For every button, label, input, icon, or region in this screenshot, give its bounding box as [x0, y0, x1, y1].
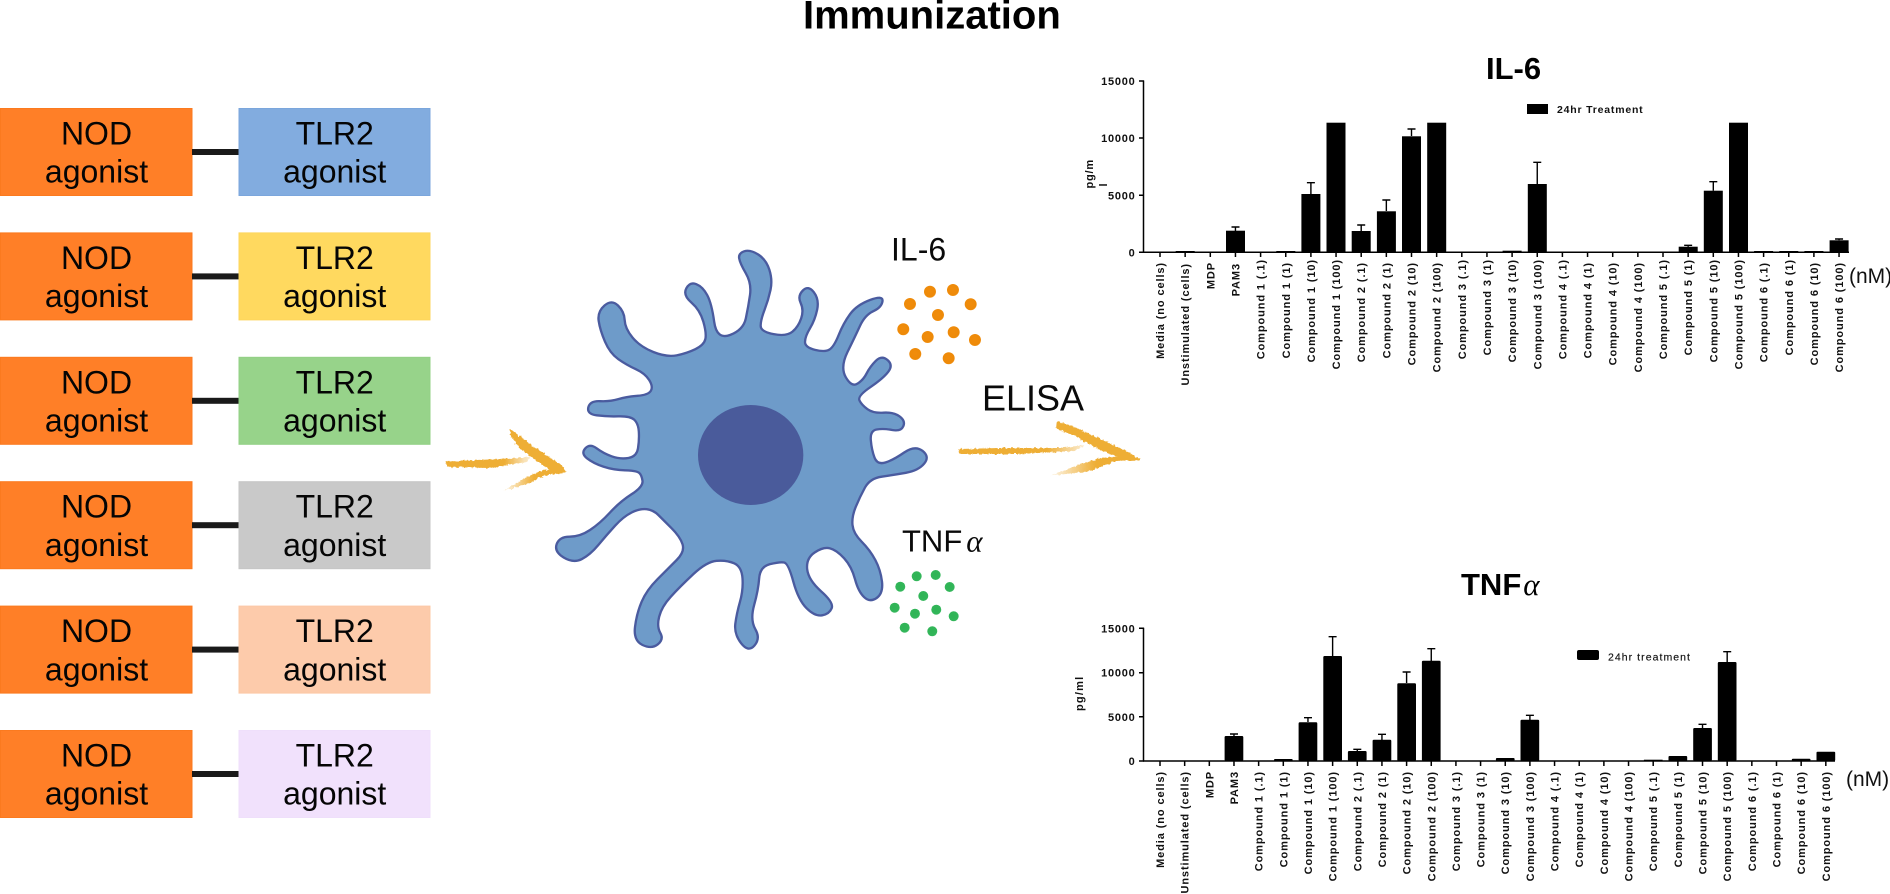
TNF alpha legend — [1577, 650, 1691, 664]
IL-6 x labels: Compound 3 (100) — [1532, 259, 1544, 369]
TNF alpha x labels: PAM3 — [1229, 771, 1241, 804]
TNF alpha x labels: Compound 5 (1) — [1673, 771, 1685, 867]
IL-6 x labels: Compound 1 (10) — [1306, 259, 1318, 362]
TNF alpha error bars — [1230, 637, 1731, 751]
IL-6 x labels: Compound 5 (10) — [1708, 259, 1720, 362]
IL-6 x labels: Media (no cells) — [1155, 262, 1167, 359]
IL-6 x labels: Compound 4 (1) — [1583, 262, 1595, 358]
IL-6 x labels: Compound 3 (10) — [1507, 259, 1519, 362]
icon: TNF alpha dots — [890, 570, 959, 636]
IL-6 y axis: 5000 — [1108, 190, 1136, 202]
label: TNF alpha cytokine: TNFα — [902, 524, 983, 558]
conjugate row 1: TLR2 — [296, 116, 374, 152]
IL-6 x labels — [1155, 259, 1846, 386]
TNF alpha x labels: Compound 6 (10) — [1796, 771, 1808, 874]
TNF alpha x labels: MDP — [1204, 771, 1216, 798]
conjugate row 4: TLR2 — [296, 489, 374, 525]
TNF alpha y axis: 5000 — [1108, 712, 1136, 724]
conjugate row 1: NOD — [61, 116, 132, 152]
TNF alpha x labels: Compound 6 (100) — [1821, 771, 1833, 881]
IL-6 x labels: PAM3 — [1230, 263, 1242, 296]
conjugate row 3: agonist — [45, 402, 148, 438]
conjugate row 4: NOD — [61, 489, 132, 525]
conjugate row 2 — [0, 233, 430, 320]
label: ELISA: ELISA — [982, 378, 1084, 418]
TNF alpha x labels: Unstimulated (cells) — [1180, 771, 1192, 894]
IL-6 x labels: Compound 2 (1) — [1381, 262, 1393, 358]
conjugate row 3: NOD — [61, 364, 132, 400]
TNF alpha x labels: Compound 4 (100) — [1624, 771, 1636, 881]
IL-6 y axis: pg/m — [1084, 159, 1096, 188]
TNF alpha x labels: Compound 1 (100) — [1328, 771, 1340, 881]
TNF alpha legend: 24hr treatment — [1608, 652, 1691, 664]
IL-6 x labels: Compound 1 (100) — [1331, 259, 1343, 369]
conjugate row 1: agonist — [283, 154, 386, 190]
IL-6 x labels: Compound 2 (.1) — [1356, 262, 1368, 362]
conjugate row 2: agonist — [283, 278, 386, 314]
conjugate row 5: agonist — [283, 651, 386, 687]
chart: TNF alpha — [1074, 567, 1889, 894]
conjugate row 4: agonist — [45, 527, 148, 563]
conjugate row 5 — [0, 606, 430, 693]
IL-6 x labels: Compound 6 (.1) — [1759, 262, 1771, 362]
TNF alpha y axis: 0 — [1129, 756, 1136, 768]
IL-6 y axis: l — [1098, 183, 1110, 186]
IL-6 x labels: Compound 3 (1) — [1482, 259, 1494, 355]
IL-6 y axis: 0 — [1129, 247, 1136, 259]
chart: IL-6 — [1084, 51, 1890, 386]
IL-6 x labels: Compound 6 (10) — [1809, 262, 1821, 365]
TNF alpha y axis: pg/ml — [1074, 676, 1086, 711]
TNF alpha x labels: Compound 4 (10) — [1599, 771, 1611, 874]
TNF alpha x labels: Compound 2 (10) — [1402, 771, 1414, 874]
IL-6 x labels: Compound 1 (.1) — [1256, 259, 1268, 359]
TNF alpha x labels: Compound 3 (.1) — [1451, 771, 1463, 871]
conjugate row 6 — [0, 730, 430, 818]
IL-6 x labels: Compound 5 (1) — [1683, 259, 1695, 355]
arrow: to charts — [958, 421, 1141, 476]
IL-6 x axis — [1143, 252, 1849, 257]
IL-6 legend: 24hr Treatment — [1557, 104, 1643, 116]
IL-6 x labels: Compound 3 (.1) — [1457, 259, 1469, 359]
IL-6 x labels: MDP — [1205, 262, 1217, 289]
TNF alpha x labels — [1155, 771, 1833, 894]
conjugate row 3: agonist — [283, 402, 386, 438]
cell nucleus — [698, 405, 803, 505]
TNF alpha x labels: Compound 5 (.1) — [1648, 771, 1660, 871]
arrow: into cell — [445, 429, 566, 491]
conjugate row 1 — [0, 108, 430, 196]
conjugate row 6: agonist — [45, 776, 148, 812]
icon: IL-6 dots — [897, 284, 981, 364]
TNF alpha x labels: Compound 5 (10) — [1698, 771, 1710, 874]
TNF alpha x labels: Compound 4 (1) — [1574, 771, 1586, 867]
IL-6 bars — [1176, 123, 1849, 252]
conjugate row 6: TLR2 — [296, 738, 374, 774]
conjugate row 5: TLR2 — [296, 613, 374, 649]
IL-6 x labels: Compound 4 (100) — [1633, 262, 1645, 372]
TNF alpha x labels: Compound 5 (100) — [1722, 771, 1734, 881]
TNF alpha unit: (nM) — [1846, 768, 1889, 791]
TNF alpha x axis — [1143, 761, 1835, 766]
conjugate row 5: agonist — [45, 651, 148, 687]
TNF alpha x labels: Media (no cells) — [1155, 771, 1167, 868]
IL-6 error bars — [1232, 129, 1843, 247]
conjugate row 2: TLR2 — [296, 240, 374, 276]
conjugate row 5: NOD — [61, 613, 132, 649]
TNF alpha x labels: Compound 1 (10) — [1303, 771, 1315, 874]
TNF alpha x labels: Compound 2 (1) — [1377, 771, 1389, 867]
TNF alpha x labels: Compound 2 (100) — [1426, 771, 1438, 881]
IL-6 x labels: Compound 4 (.1) — [1557, 259, 1569, 359]
TNF alpha y axis: 15000 — [1101, 623, 1136, 635]
conjugate row 2: NOD — [61, 240, 132, 276]
label: IL-6 cytokine: IL-6 — [891, 232, 946, 268]
conjugate row 2: agonist — [45, 278, 148, 314]
IL-6 y axis — [1084, 76, 1144, 259]
IL-6 y axis: 10000 — [1101, 133, 1136, 145]
conjugate row 6: NOD — [61, 738, 132, 774]
conjugate row 4: agonist — [283, 527, 386, 563]
TNF alpha x labels: Compound 2 (.1) — [1352, 771, 1364, 871]
TNF alpha bars — [1225, 656, 1835, 761]
IL-6 x labels: Compound 5 (100) — [1733, 259, 1745, 369]
chart title: IL-6: IL-6 — [1486, 51, 1541, 86]
IL-6 x labels: Compound 6 (100) — [1834, 262, 1846, 372]
icon: dendritic cell — [556, 251, 927, 649]
IL-6 x labels: Unstimulated (cells) — [1180, 263, 1192, 386]
conjugate row 4 — [0, 482, 430, 569]
TNF alpha x labels: Compound 4 (.1) — [1550, 771, 1562, 871]
IL-6 x labels: Compound 2 (100) — [1432, 262, 1444, 372]
IL-6 x labels: Compound 5 (.1) — [1658, 259, 1670, 359]
TNF alpha x labels: Compound 6 (.1) — [1747, 771, 1759, 871]
IL-6 x labels: Compound 1 (1) — [1281, 262, 1293, 358]
conjugate row 6: agonist — [283, 776, 386, 812]
IL-6 x labels: Compound 6 (1) — [1784, 259, 1796, 355]
TNF alpha x labels: Compound 3 (1) — [1476, 771, 1488, 867]
TNF alpha x labels: Compound 3 (100) — [1525, 771, 1537, 881]
TNF alpha y axis — [1074, 623, 1144, 768]
TNF alpha x labels: Compound 1 (1) — [1278, 771, 1290, 867]
TNF alpha x labels: Compound 3 (10) — [1500, 771, 1512, 874]
TNF alpha x labels: Compound 1 (.1) — [1254, 771, 1266, 871]
conjugate row 3: TLR2 — [296, 364, 374, 400]
IL-6 x labels: Compound 2 (10) — [1406, 262, 1418, 365]
TNF alpha x labels: Compound 6 (1) — [1772, 771, 1784, 867]
conjugate row 1: agonist — [45, 154, 148, 190]
IL-6 x labels: Compound 4 (10) — [1608, 262, 1620, 365]
chart title: TNF alpha: TNFα — [1461, 567, 1540, 602]
TNF alpha y axis: 10000 — [1101, 668, 1136, 680]
IL-6 y axis: 15000 — [1101, 76, 1136, 88]
panel: conjugate list — [0, 108, 430, 818]
conjugate row 3 — [0, 357, 430, 444]
